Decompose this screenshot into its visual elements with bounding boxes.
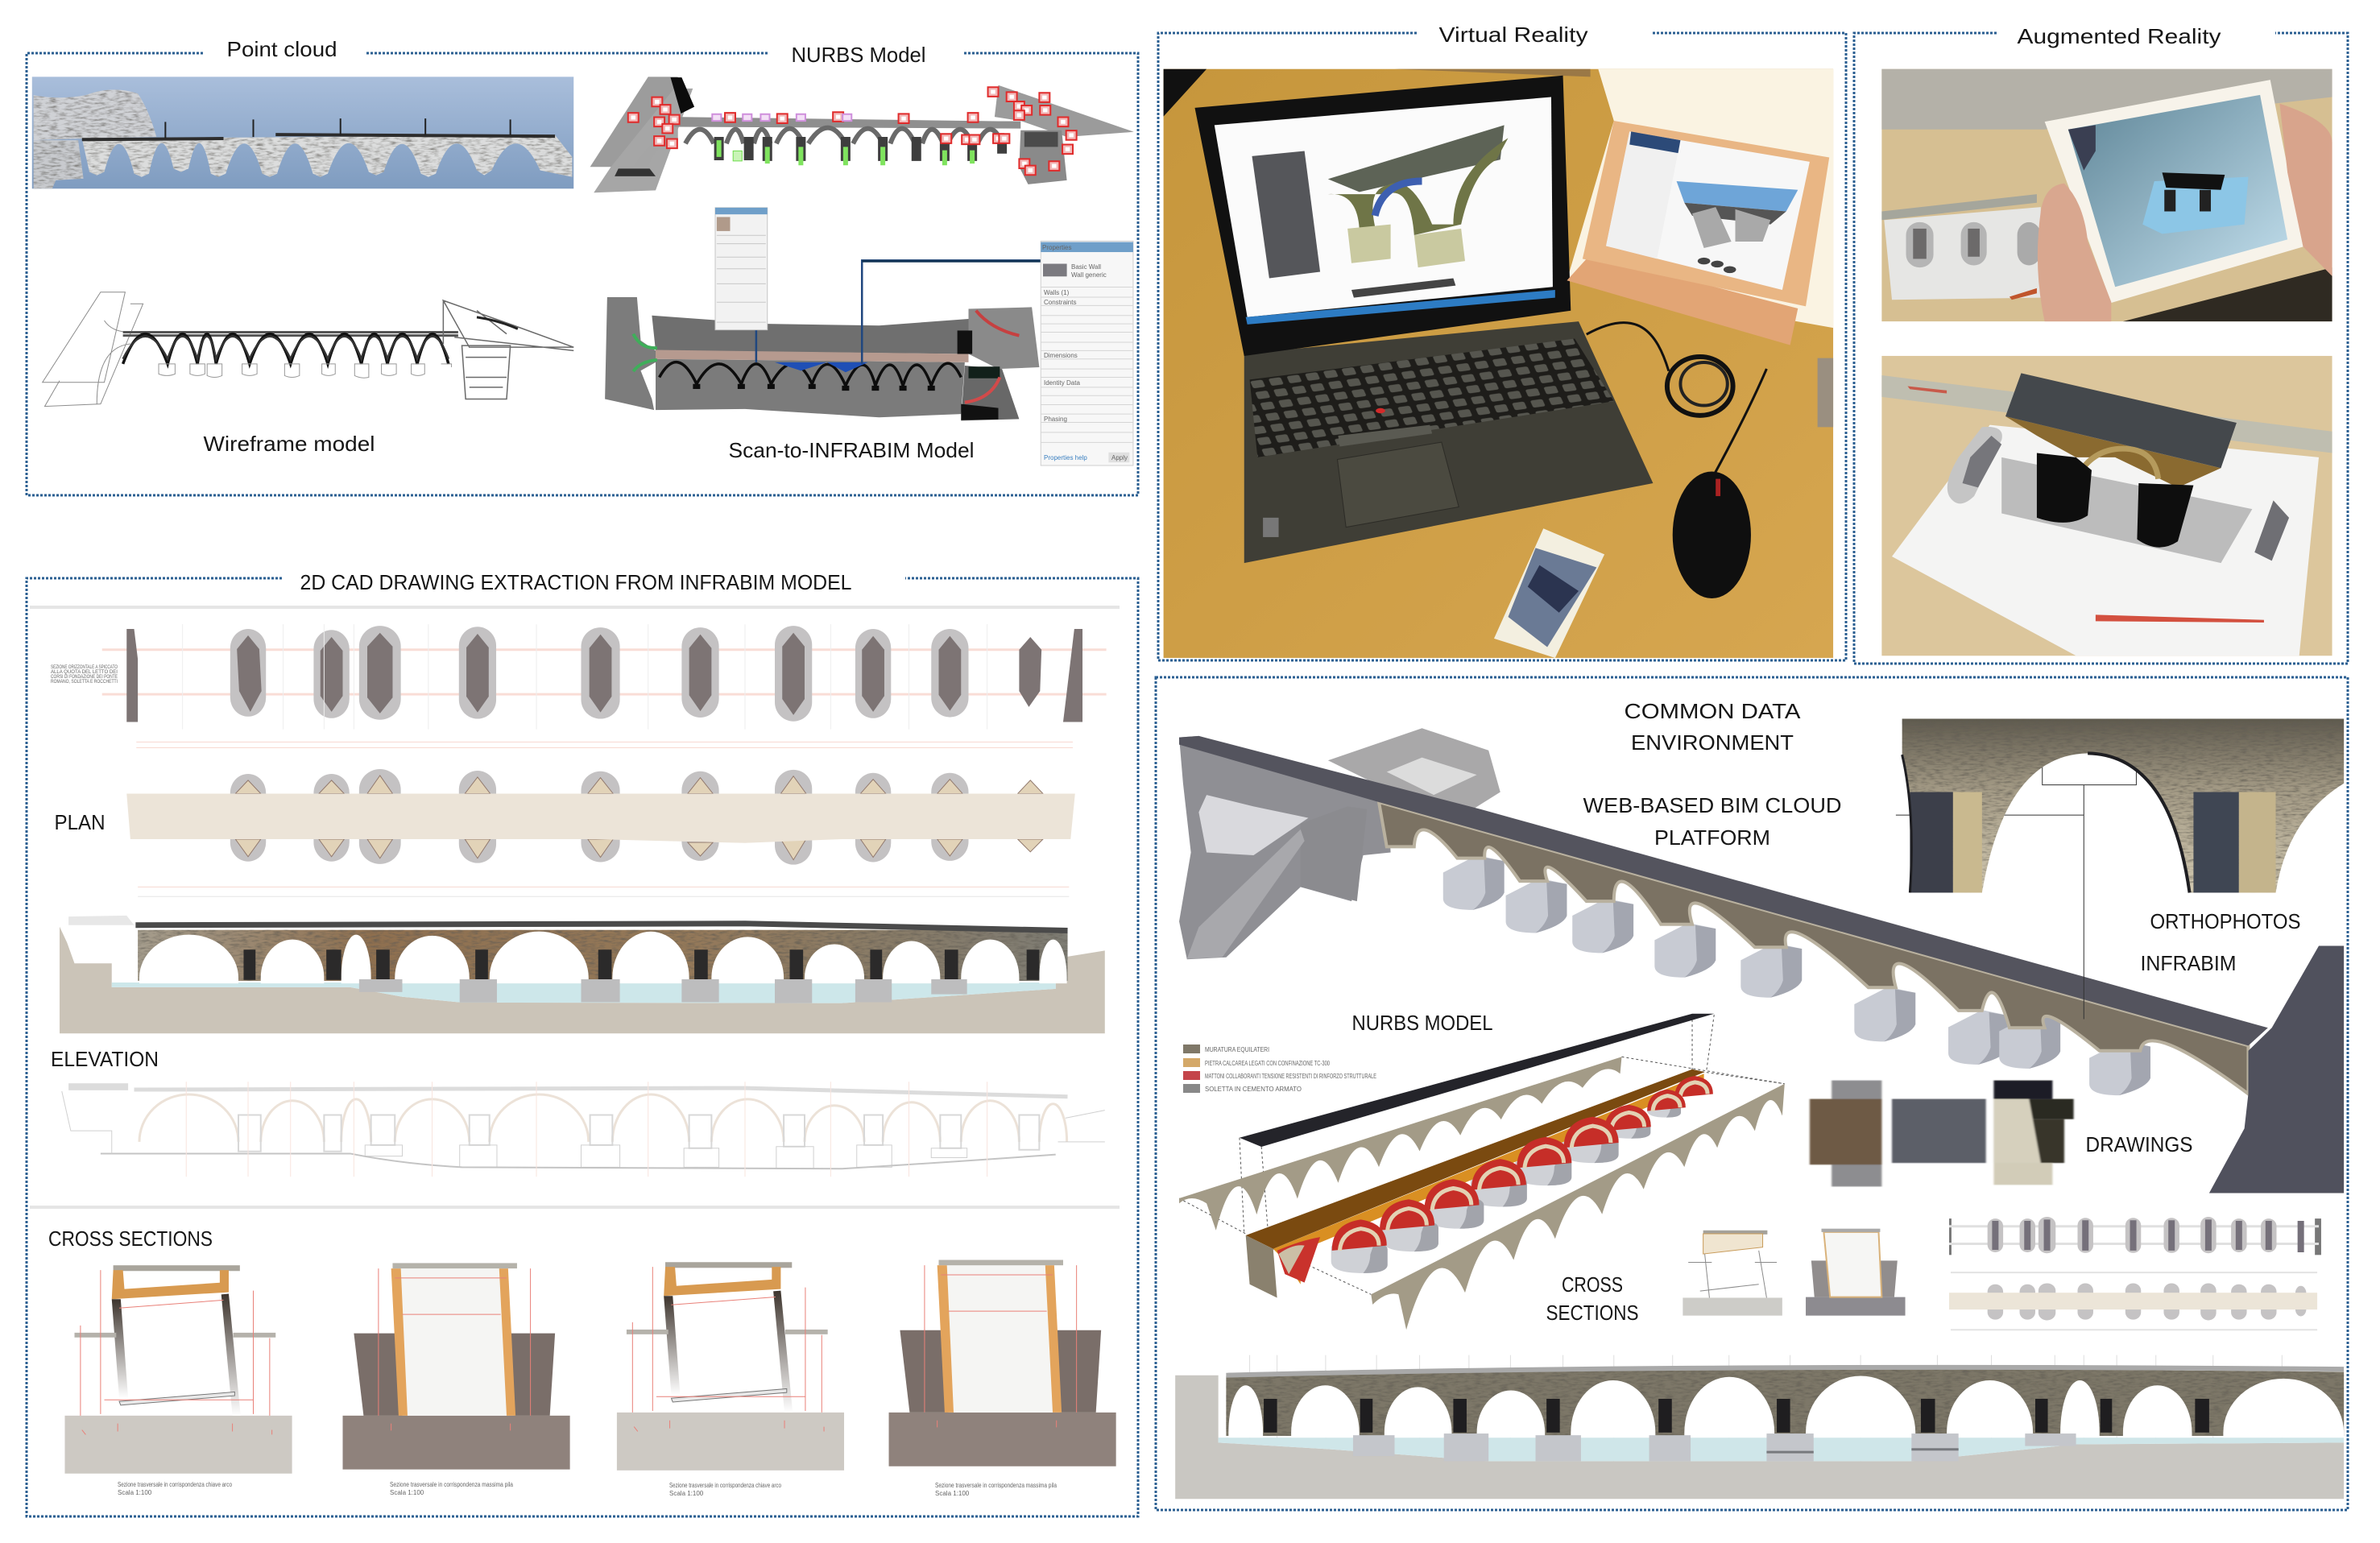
tablet on cover — [1567, 121, 1829, 345]
label: cross sections: CROSS — [1562, 1272, 1623, 1297]
cross section captions: Sezione trasversale in corrispondenza massima pila — [390, 1481, 513, 1488]
piers — [1331, 1098, 1681, 1273]
label: drawings: DRAWINGS — [2086, 1132, 2192, 1156]
note text on foundation plan: SEZIONE ORIZZONTALE A SPICCATO — [51, 665, 118, 670]
label: cross sections — [1546, 1272, 1638, 1325]
heading: wireframe model: Wireframe model — [203, 432, 375, 456]
heading: web-based BIM cloud platform — [1583, 793, 1841, 850]
left abutment — [1179, 728, 1500, 959]
heading: Scan-to-INFRABIM model: Scan-to-INFRABIM Model — [728, 438, 975, 462]
heading: 2D CAD drawing extraction: 2D CAD DRAWING EXTRACTION FROM INFRABIM MODEL — [300, 570, 852, 594]
cross section captions — [118, 1481, 1057, 1497]
note text on foundation plan: CORSI DI FONDAZIONE DEI PONTE — [51, 675, 118, 680]
right abutment — [2209, 946, 2344, 1193]
image: point cloud of the bridge — [32, 77, 573, 188]
image: orthophoto of arch — [1902, 718, 2344, 892]
heading: web-based BIM cloud platform: PLATFORM — [1654, 825, 1770, 850]
cross section captions: Scala 1:100 — [935, 1490, 970, 1497]
panel: point cloud, NURBS, wireframe and Scan-to-INFRABIM models — [27, 37, 1138, 495]
heading: augmented reality: Augmented Reality — [2017, 24, 2221, 48]
photo: laptop, tablet, phone and mouse on a desk — [1164, 69, 1833, 658]
heading: web-based BIM cloud platform: WEB-BASED BIM CLOUD — [1583, 793, 1841, 817]
heading: plan: PLAN — [55, 810, 105, 834]
cross section at arch crown, second — [617, 1262, 844, 1471]
image: wireframe model — [43, 292, 573, 407]
cross section at pier, second — [889, 1260, 1116, 1466]
heading: common data environment: COMMON DATA — [1624, 699, 1801, 723]
cross section captions: Sezione trasversale in corrispondenza massima pila — [935, 1482, 1057, 1489]
properties panel labels: Constraints — [1044, 299, 1076, 306]
panel: common data environment — [1156, 677, 2348, 1510]
panel: 2D CAD drawing extraction — [27, 570, 1138, 1516]
model: exploded NURBS bridge — [1179, 1014, 1785, 1330]
deck — [1179, 736, 2268, 1045]
image: NURBS model with control points — [590, 77, 1134, 192]
label: orthophotos: ORTHOPHOTOS — [2150, 909, 2300, 933]
cross section captions: Sezione trasversale in corrispondenza chiave arco — [118, 1481, 232, 1488]
leader line — [1896, 746, 2136, 1020]
middle deck and orange vault — [1246, 1069, 1713, 1297]
properties panel labels: Wall generic — [1071, 271, 1107, 279]
drawing: textured elevation along the bottom — [1175, 1355, 2344, 1499]
properties panel labels: Properties — [1042, 244, 1071, 251]
panel: virtual reality — [1158, 23, 1846, 660]
rear arcade — [1179, 1057, 1622, 1231]
cross section at arch crown, first — [64, 1265, 292, 1474]
properties panel labels: Phasing — [1044, 416, 1067, 423]
front arcade — [1371, 1084, 1785, 1330]
properties panel labels: Apply — [1111, 454, 1128, 461]
properties panel labels — [1042, 244, 1128, 461]
smartphone — [1494, 528, 1604, 658]
heading: NURBS model: NURBS Model — [791, 43, 926, 67]
drawing: cross sections — [64, 1260, 1116, 1474]
note text on foundation plan: ALLA QUOTA DEL LETTO DEI — [51, 670, 118, 675]
mouse with cables — [1587, 323, 1766, 598]
properties panel labels: Walls (1) — [1044, 289, 1070, 296]
note text on foundation plan — [51, 665, 118, 685]
panel border — [27, 53, 1138, 495]
model: INFRABIM bridge perspective — [1179, 728, 2344, 1193]
drawing: deck plan — [126, 742, 1075, 896]
thumbnails: cross sections — [1683, 1229, 1906, 1316]
thumbnails: plans — [1949, 1217, 2321, 1330]
drawing: foundation plan — [102, 624, 1107, 730]
heading: common data environment: ENVIRONMENT — [1631, 730, 1794, 755]
heading: elevation: ELEVATION — [51, 1047, 159, 1071]
properties panel labels: Dimensions — [1044, 352, 1078, 359]
label: infrabim: INFRABIM — [2141, 951, 2236, 975]
legend: materials: SOLETTA IN CEMENTO ARMATO — [1205, 1086, 1302, 1093]
panel border — [1854, 33, 2348, 664]
image: orthophoto samples — [1810, 1081, 2074, 1186]
panel: augmented reality — [1854, 24, 2348, 664]
cross section captions: Sezione trasversale in corrispondenza chiave arco — [669, 1482, 781, 1489]
cross section captions: Scala 1:100 — [118, 1489, 152, 1496]
panel border — [27, 578, 1138, 1516]
image: Scan-to-INFRABIM model with property panels — [605, 208, 1133, 465]
sheet frame lines — [30, 607, 1120, 1207]
properties panel labels: Properties help — [1044, 454, 1087, 461]
legend: materials — [1183, 1045, 1376, 1093]
heading: point cloud: Point cloud — [227, 37, 337, 61]
legend: materials: MURATURA EQUILATERI — [1205, 1046, 1269, 1053]
label: cross sections: SECTIONS — [1546, 1301, 1638, 1325]
panel border — [1158, 33, 1846, 660]
note text on foundation plan: ROMANO, SOLETTA E ROCCHETTI — [51, 680, 118, 685]
deck slab — [1240, 1014, 1714, 1147]
heading: virtual reality: Virtual Reality — [1438, 23, 1588, 47]
photo: bridge model in AR over printed plan — [1881, 356, 2332, 656]
heading: NURBS model: NURBS MODEL — [1351, 1011, 1493, 1035]
properties panel labels: Basic Wall — [1071, 263, 1101, 271]
panel border — [1156, 677, 2348, 1510]
heading: common data environment — [1624, 699, 1801, 755]
properties panel labels: Identity Data — [1044, 379, 1080, 387]
heading: cross sections: CROSS SECTIONS — [48, 1227, 213, 1251]
photo: tablet held over printed plan — [1881, 69, 2332, 321]
cross section at pier, first — [343, 1263, 570, 1470]
laptop — [1194, 76, 1653, 563]
legend: materials: MATTONI COLLABORANTI TENSIONE RESISTENTI DI RINFORZO STRUTTURALE — [1205, 1073, 1376, 1080]
bridge piers — [1443, 855, 2150, 1095]
legend: materials: PIETRA CALCAREA LEGATI CON CONFINAZIONE TC-300 — [1205, 1060, 1330, 1067]
drawing: elevation line work — [62, 1082, 1105, 1177]
arcade below deck — [1379, 802, 2249, 1094]
drawing: textured bridge elevation — [60, 916, 1105, 1033]
cross section captions: Scala 1:100 — [669, 1490, 704, 1497]
cross section captions: Scala 1:100 — [390, 1489, 424, 1496]
